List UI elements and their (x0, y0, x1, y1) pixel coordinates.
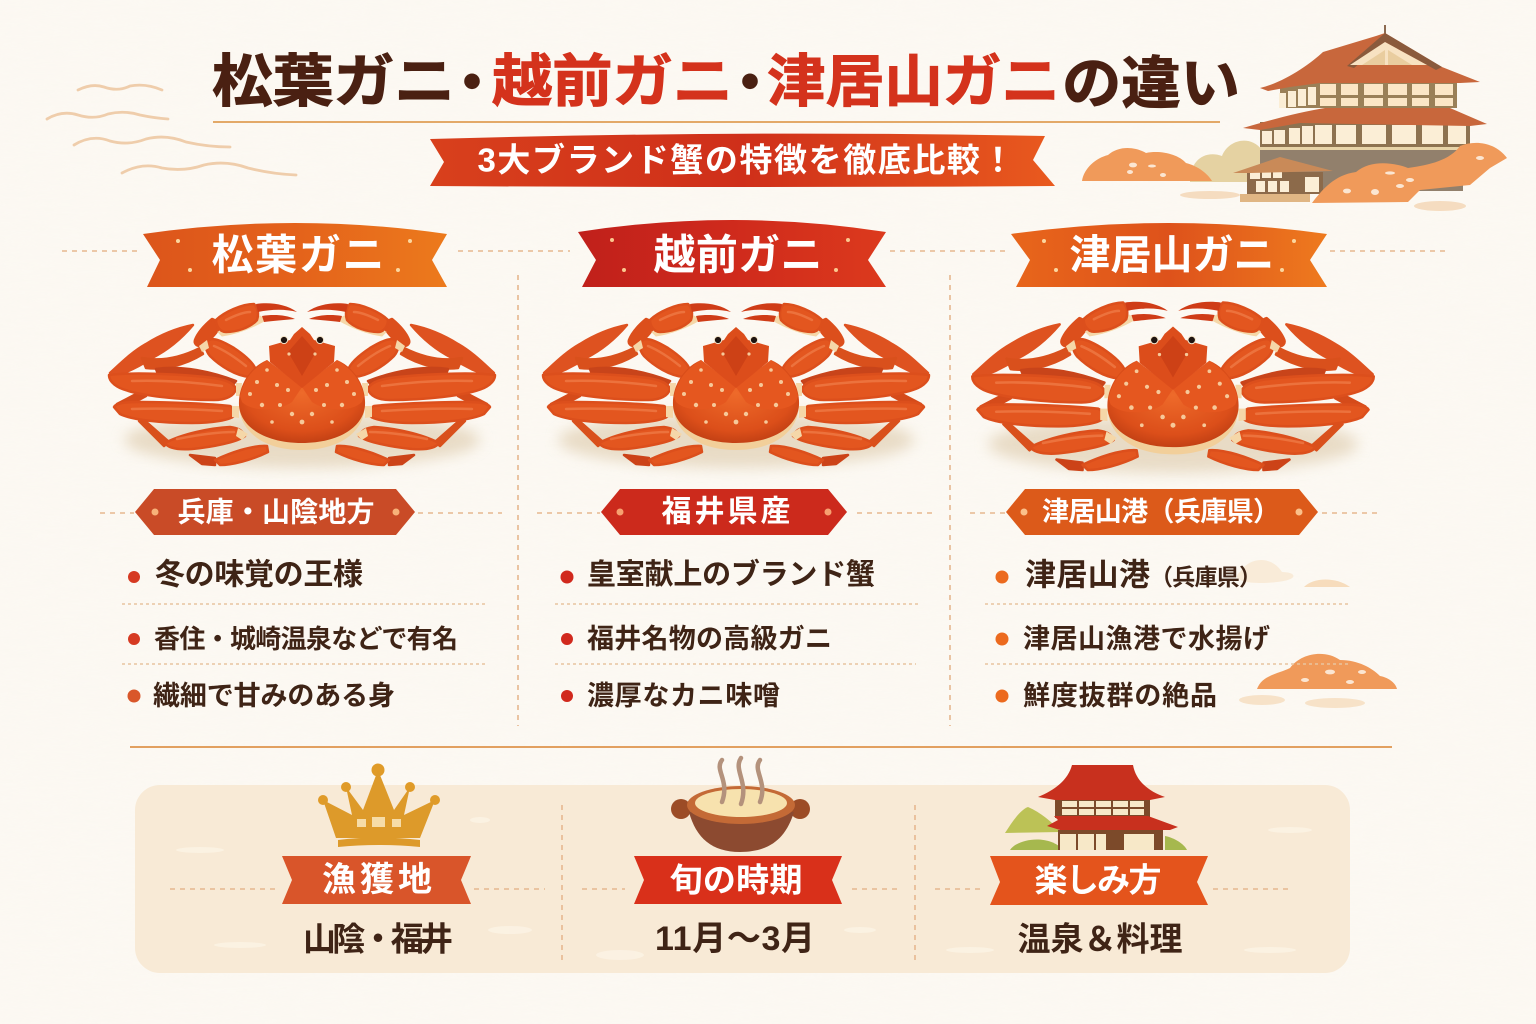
title: ・ (722, 52, 778, 116)
region tag: 兵庫・山陰地方 (178, 496, 374, 528)
bushes behind castle (1190, 141, 1262, 182)
feature list (985, 558, 1350, 711)
icon: hot pot (671, 758, 810, 852)
castle illustration (1082, 25, 1507, 211)
column: 越前ガニ (537, 220, 933, 711)
value: 温泉＆料理 (1018, 920, 1182, 958)
front bushes (1312, 143, 1507, 203)
heading ribbon: 越前ガニ (654, 232, 822, 278)
feature list: 津居山漁港で水揚げ (1023, 624, 1270, 654)
region tag: 福井県産 (662, 496, 790, 528)
feature list: 鮮度抜群の絶品 (1023, 681, 1217, 711)
icon: japanese inn (1005, 765, 1187, 850)
feature list: 津居山港 (1025, 558, 1150, 592)
cloud decorations (1237, 560, 1397, 708)
region tag (100, 489, 502, 535)
feature list (555, 557, 918, 711)
crab illustration (972, 302, 1374, 473)
title: 松葉ガニ (212, 50, 455, 114)
region tag (970, 489, 1377, 535)
ribbon: 漁獲地 (322, 861, 432, 899)
feature list: 福井名物の高級ガニ (587, 624, 832, 654)
ribbon: 楽しみ方 (1034, 862, 1162, 898)
crab illustration (109, 303, 495, 468)
title: ・ (444, 52, 500, 116)
ribbon (634, 856, 842, 904)
ribbon (990, 856, 1208, 905)
item: fishing grounds (282, 764, 471, 958)
feature list (122, 558, 485, 711)
feature list: 皇室献上のブランド蟹 (587, 557, 875, 591)
region tag (537, 489, 933, 535)
title (212, 50, 1240, 116)
horizontal divider (130, 746, 1392, 748)
feature list: 濃厚なカニ味噌 (587, 681, 780, 711)
value: 11月～3月 (655, 920, 815, 958)
feature list: （兵庫県） (1150, 564, 1262, 590)
column: 津居山ガニ (970, 223, 1397, 711)
heading ribbon: 松葉ガニ (212, 232, 384, 278)
wave decoration top left (47, 85, 296, 175)
ribbon (282, 856, 471, 904)
annex (1247, 172, 1323, 194)
feature list: 繊細で甘みのある身 (153, 681, 395, 711)
subtitle banner (430, 134, 1055, 187)
panel: summary (135, 758, 1350, 973)
column: 松葉ガニ (100, 223, 502, 711)
crab illustration (543, 303, 929, 468)
heading ribbon: 津居山ガニ (1070, 232, 1274, 278)
section dashed divider lines (62, 251, 1450, 726)
heading ribbon (143, 223, 447, 287)
region tag: 津居山港（兵庫県） (1042, 497, 1280, 527)
ribbon: 旬の時期 (670, 862, 802, 898)
main castle (1384, 25, 1386, 37)
title: の違い (1062, 52, 1240, 116)
title: 津居山ガニ (767, 50, 1060, 114)
heading ribbon (1011, 223, 1327, 287)
value: 山陰・福井 (303, 920, 453, 958)
item: enjoyment (990, 765, 1208, 958)
feature list: 冬の味覚の王様 (155, 558, 363, 592)
title: 越前ガニ (492, 50, 733, 114)
icon: crown (318, 764, 440, 847)
item: season (634, 758, 842, 958)
heading ribbon (578, 220, 886, 287)
feature list: 香住・城崎温泉などで有名 (154, 624, 458, 654)
subtitle banner: 3大ブランド蟹の特徴を徹底比較！ (478, 142, 1014, 178)
